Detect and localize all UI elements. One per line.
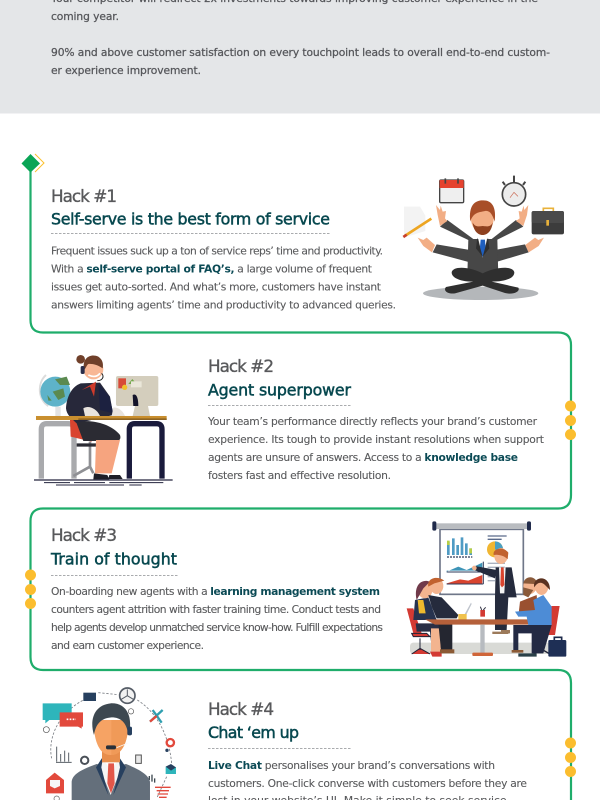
section: hack 4: [43, 688, 576, 800]
connector line: [30, 163, 571, 800]
hack 4 body: customers. One-click converse with customers before they are: [208, 777, 527, 790]
hack 2 body: experience. Its tough to provide instant resolutions when support: [208, 433, 544, 446]
hack 3 title: Train of thought: [50, 550, 177, 568]
hack 3 body: On-boarding new agents with a learning management system: [51, 585, 380, 598]
panel: intro summary: er experience improvement.: [51, 64, 201, 77]
panel: intro summary: [0, 0, 600, 114]
hack 2 title: Agent superpower: [208, 380, 352, 400]
hack 4 body: [208, 759, 527, 800]
icon: yellow dots: [565, 400, 576, 440]
icon: yellow dots: [565, 738, 576, 777]
hack 1 body: With a self-serve portal of FAQ’s, a large volume of frequent: [51, 262, 372, 276]
icon: start diamond: [22, 154, 44, 172]
hack 2 body: fosters fast and effective resolution.: [208, 469, 391, 482]
hack 4 title: Chat ‘em up: [208, 723, 299, 742]
hack 1 body: issues get auto-sorted. And what’s more, customers have instant: [51, 280, 381, 294]
hack 3 body: help agents develop unmatched service know-how. Fulfill expectations: [51, 621, 383, 634]
hack 3 body: [51, 585, 383, 652]
section: hack 1: [51, 176, 564, 312]
hack 3 label: Hack #3: [51, 525, 117, 545]
hack 4 label: Hack #4: [208, 699, 274, 719]
hack 1 title: Self-serve is the best form of service: [51, 210, 330, 228]
panel: intro summary: coming year.: [51, 10, 119, 23]
section: hack 2: [34, 355, 576, 485]
panel: intro summary: 90% and above customer satisfaction on every touchpoint leads to overall end-to-end custom-: [51, 46, 550, 59]
hack 1 body: answers limiting agents’ time and productivity to advanced queries.: [51, 298, 396, 312]
hack 2 body: [207, 415, 544, 482]
hack 4 body: Live Chat personalises your brand’s conversations with: [208, 759, 495, 772]
illustration: headset support agent: [43, 688, 176, 800]
hack 2 body: Your team’s performance directly reflects your brand’s customer: [207, 415, 538, 428]
illustration: agent at desk: [34, 355, 173, 485]
hack 2 label: Hack #2: [208, 356, 274, 376]
illustration: multitasking businessman: [403, 176, 564, 300]
hack 3 body: and earn customer experience.: [51, 639, 204, 652]
hack 3 body: counters agent attrition with faster training time. Conduct tests and: [51, 603, 381, 616]
section: hack 3: [25, 521, 566, 657]
hack 1 body: Frequent issues suck up a ton of service reps’ time and productivity.: [51, 244, 383, 258]
hack 1 label: Hack #1: [51, 186, 117, 206]
icon: yellow dots: [25, 570, 36, 609]
hack 1 body: [51, 244, 396, 312]
illustration: team meeting: [407, 521, 566, 657]
hack 2 body: agents are unsure of answers. Access to a knowledge base: [208, 451, 518, 464]
